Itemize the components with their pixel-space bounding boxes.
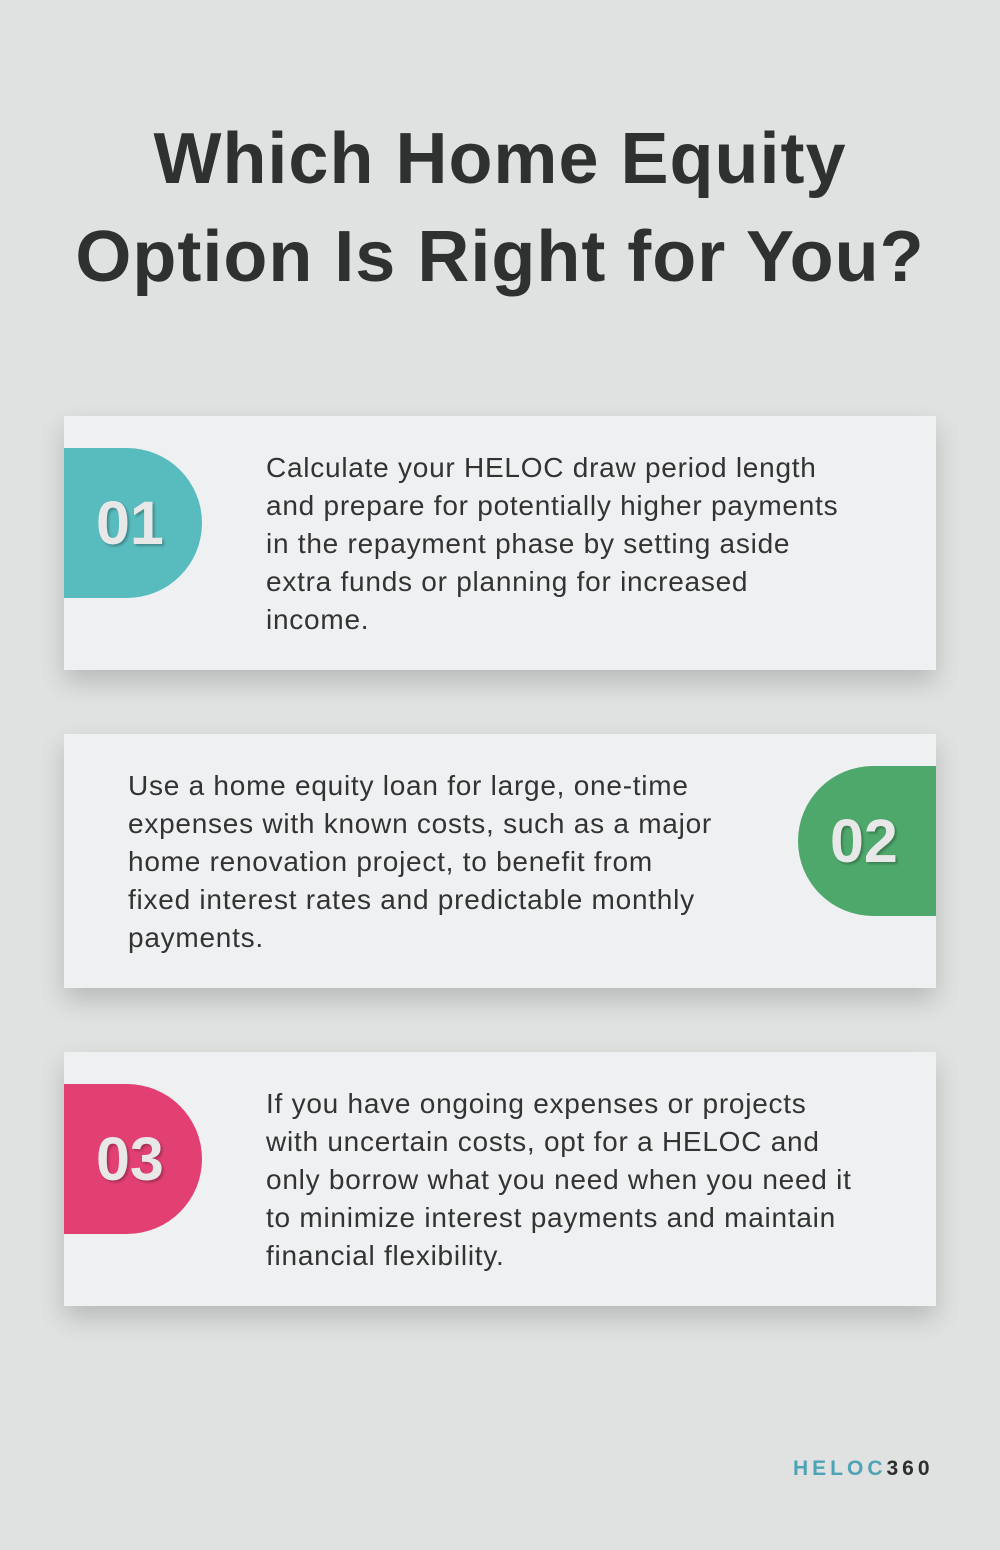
text 02: expenses with known costs, such as a major — [128, 808, 712, 839]
text 02: home renovation project, to benefit from — [128, 846, 653, 877]
panel: step 01 — [64, 416, 936, 670]
text 02: fixed interest rates and predictable monthly — [128, 884, 695, 915]
text 02: payments. — [128, 922, 264, 953]
text 03: to minimize interest payments and maintain — [266, 1202, 836, 1233]
logo: HELOC360 — [793, 1457, 934, 1480]
badge 01: 01 — [96, 489, 164, 557]
text 03 — [266, 1088, 852, 1271]
badge 03 — [64, 1084, 202, 1234]
text 01: extra funds or planning for increased — [266, 566, 748, 597]
badge 02: 02 — [830, 807, 898, 875]
title: Which Home Equity — [153, 119, 847, 199]
text 03: If you have ongoing expenses or projects — [266, 1088, 807, 1119]
panel: step 03 — [64, 1052, 936, 1306]
panel: step 02 — [64, 734, 936, 988]
text 03: with uncertain costs, opt for a HELOC and — [266, 1126, 820, 1157]
text 01: income. — [266, 604, 369, 635]
text 03: only borrow what you need when you need it — [266, 1164, 852, 1195]
title: Option Is Right for You? — [75, 217, 925, 297]
text 02 — [128, 770, 712, 953]
text 02: Use a home equity loan for large, one-time — [128, 770, 689, 801]
text 03: financial flexibility. — [266, 1240, 505, 1271]
text 01 — [266, 452, 838, 635]
badge 02 — [798, 766, 936, 916]
text 01: in the repayment phase by setting aside — [266, 528, 790, 559]
text 01: Calculate your HELOC draw period length — [266, 452, 817, 483]
badge 01 — [64, 448, 202, 598]
badge 03: 03 — [96, 1125, 164, 1193]
title — [75, 119, 925, 297]
text 01: and prepare for potentially higher payments — [266, 490, 838, 521]
